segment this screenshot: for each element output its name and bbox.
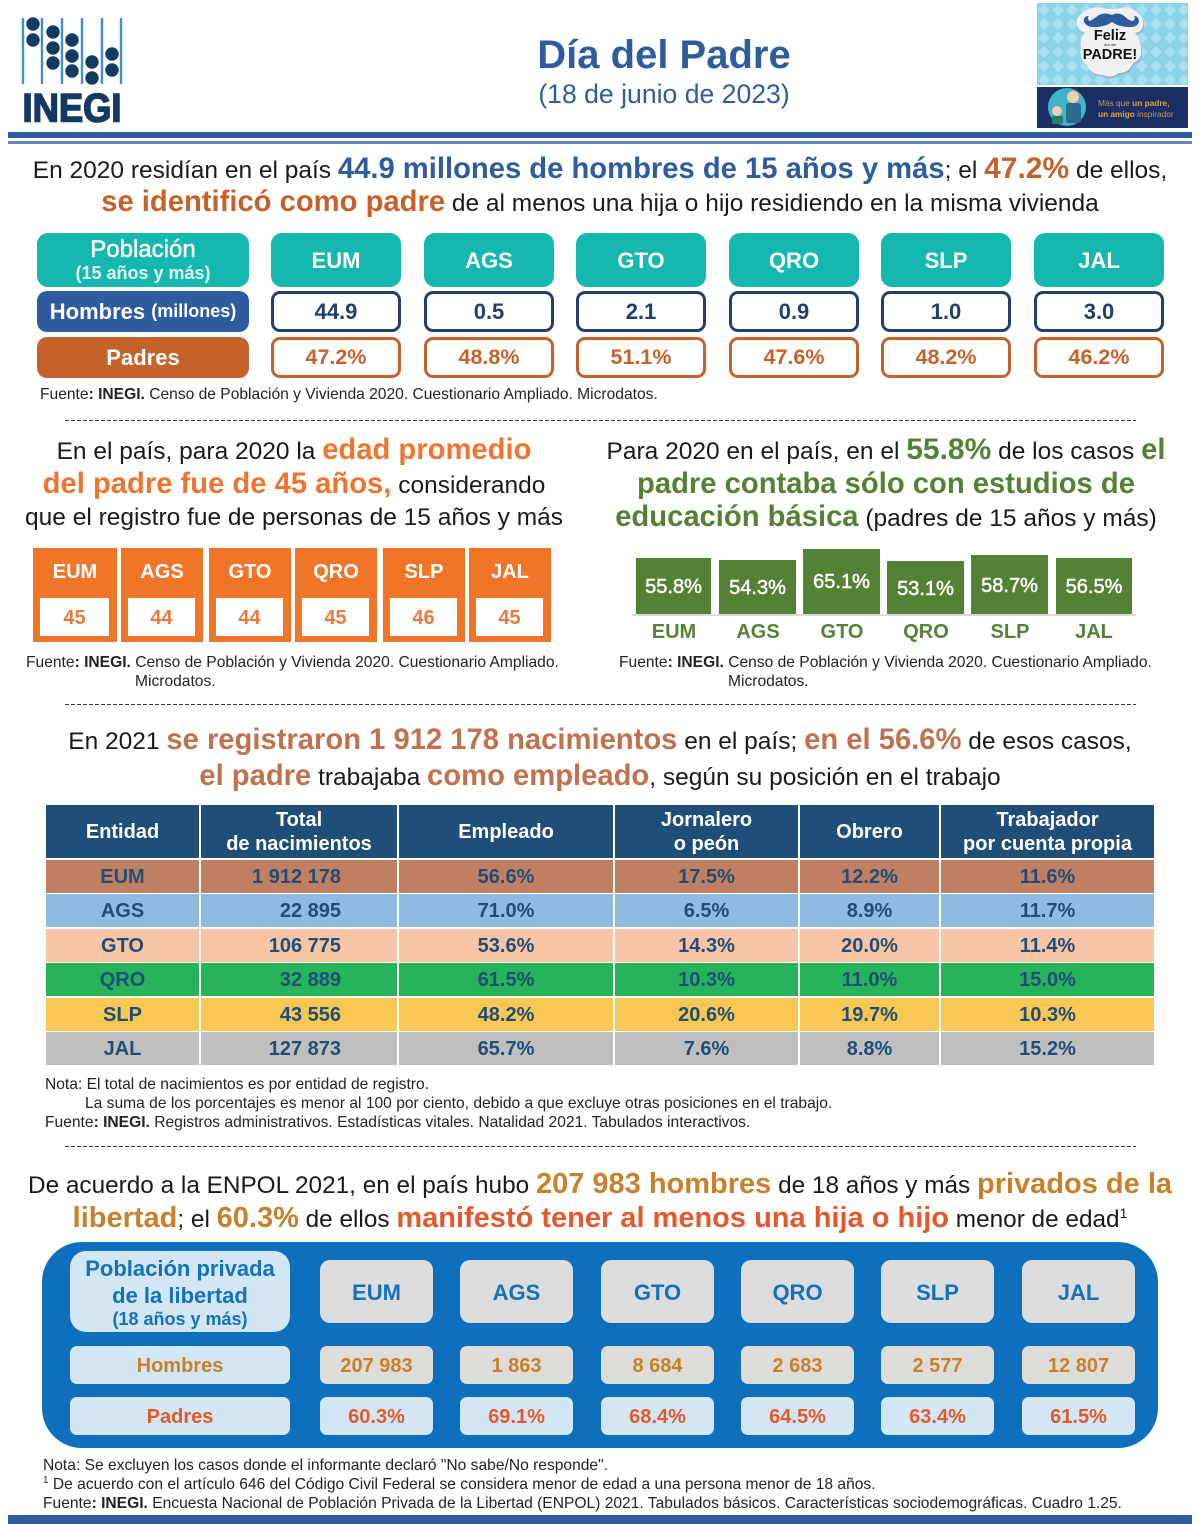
column: SLP: 1.0 xyxy=(931,298,961,324)
row: QRO: 61.5% xyxy=(478,969,534,991)
row: EUM xyxy=(46,860,1154,893)
column: AGS: 0.5 xyxy=(474,298,504,324)
column: QRO: 2 683 xyxy=(772,1354,823,1376)
column: EUM: 47.2% xyxy=(306,345,366,369)
table notes xyxy=(45,1076,832,1131)
footer rule xyxy=(8,1515,1192,1524)
column: EUM: 207 983 xyxy=(340,1354,413,1376)
logo: INEGI xyxy=(22,17,122,125)
label: padres: Padres xyxy=(147,1406,213,1428)
label: padres xyxy=(70,1397,290,1435)
row: SLP: 48.2% xyxy=(478,1004,534,1026)
table header: Trabajador xyxy=(996,808,1099,830)
bar: JAL: 56.5% xyxy=(1066,576,1122,598)
column: JAL: JAL xyxy=(1058,1280,1099,1304)
column: SLP: 2 577 xyxy=(912,1354,963,1376)
row: AGS: 22 895 xyxy=(280,900,341,922)
table header: Obrero xyxy=(836,820,903,842)
column: JAL: 3.0 xyxy=(1084,298,1114,324)
column: AGS: AGS xyxy=(493,1280,540,1304)
card: AGS: 44 xyxy=(150,606,173,628)
bar: SLP xyxy=(971,555,1048,614)
section 2 heading: edad promedio: que el registro fue de personas de 15 años y más xyxy=(25,504,563,531)
table header: Entidad xyxy=(86,820,159,842)
section 2 heading: edad promedio xyxy=(25,434,563,531)
row label: población xyxy=(37,233,249,287)
image: Feliz día del Padre: Más que un padre, xyxy=(1098,98,1169,108)
row: JAL: 15.2% xyxy=(1019,1038,1076,1060)
table notes: La suma de los porcentajes es menor al 100 por ciento, debido a que excluye otras posiciones en el trabajo. xyxy=(85,1095,832,1112)
column: SLP: 48.2% xyxy=(916,345,976,369)
bar: EUM: 55.8% xyxy=(645,576,702,598)
label: hombres xyxy=(70,1346,290,1384)
section 5 heading: privados de la libertad: libertad; el 60.3% de ellos manifestó tener al menos una hija o hijo menor de edad1 xyxy=(73,1202,1127,1234)
column: QRO: QRO xyxy=(769,248,819,273)
row: AGS: 11.7% xyxy=(1020,900,1075,922)
column: EUM: EUM xyxy=(352,1280,401,1304)
row: JAL: 8.8% xyxy=(847,1038,892,1060)
source note 3: Fuente: INEGI. Censo de Población y Vivienda 2020. Cuestionario Ampliado. xyxy=(619,654,1152,671)
row: EUM: 12.2% xyxy=(841,866,898,888)
column: QRO: 0.9 xyxy=(779,298,809,324)
row: EUM: 17.5% xyxy=(678,866,735,888)
column: QRO xyxy=(741,1260,854,1435)
section 3 heading: estudios: padre contaba sólo con estudios de xyxy=(637,468,1135,500)
column: AGS: 48.8% xyxy=(459,345,519,369)
row: AGS: AGS xyxy=(101,900,144,922)
column: QRO: 47.6% xyxy=(764,345,824,369)
card: SLP: 46 xyxy=(412,606,435,628)
column: SLP: SLP xyxy=(916,1280,959,1304)
label: JAL: JAL xyxy=(1075,620,1113,642)
row: GTO: 106 775 xyxy=(269,935,341,957)
footer notes: Fuente: INEGI. Encuesta Nacional de Población Privada de la Libertad (ENPOL) 2021. Tabulados básicos. Características sociodemográficas. Cuadro 1.25. xyxy=(43,1495,1122,1512)
column: JAL: JAL xyxy=(1078,248,1120,273)
label: población privada: (18 años y más) xyxy=(112,1308,248,1328)
column: GTO: GTO xyxy=(617,248,665,273)
row label: padres xyxy=(37,337,249,378)
source note 2 xyxy=(26,654,559,690)
table notes: Fuente: INEGI. Registros administrativos. Estadísticas vitales. Natalidad 2021. Tabulados interactivos. xyxy=(45,1114,750,1131)
card: JAL: 45 xyxy=(498,606,521,628)
column: AGS xyxy=(460,1260,573,1435)
source note 2: Fuente: INEGI. Censo de Población y Vivienda 2020. Cuestionario Ampliado. xyxy=(26,654,559,671)
row label: padres: Padres xyxy=(106,344,180,370)
label: SLP: SLP xyxy=(991,620,1029,642)
section 1 heading xyxy=(33,152,1167,218)
subtitle: (18 de junio de 2023) xyxy=(538,79,790,109)
row: JAL: 65.7% xyxy=(478,1038,534,1060)
row label: hombres: (millones) xyxy=(151,301,236,321)
column: QRO: QRO xyxy=(772,1280,823,1304)
source note 2: Microdatos. xyxy=(135,673,216,690)
section 5 heading: privados de la libertad: De acuerdo a la ENPOL 2021, en el país hubo 207 983 hombres de 18 años y más privados de la xyxy=(28,1168,1172,1200)
section 2 heading: edad promedio: del padre fue de 45 años, considerando xyxy=(43,468,545,500)
column: GTO: GTO xyxy=(634,1280,681,1304)
row: QRO: 32 889 xyxy=(280,969,341,991)
table header: Empleado xyxy=(458,820,554,842)
row: QRO: 10.3% xyxy=(678,969,735,991)
row: AGS: 6.5% xyxy=(684,900,729,922)
row: EUM: EUM xyxy=(100,866,145,888)
row: AGS xyxy=(46,894,1154,927)
section 1 heading: se identificó como padre de al menos una hija o hijo residiendo en la misma vivienda xyxy=(101,186,1099,218)
column: EUM: 60.3% xyxy=(348,1406,405,1428)
panel: hombres y padres por entidad xyxy=(37,233,1164,378)
image: Feliz día del Padre: un amigo inspirador xyxy=(1098,109,1174,119)
row: SLP xyxy=(46,998,1154,1031)
table header: Total xyxy=(276,808,322,830)
row: QRO: 15.0% xyxy=(1019,969,1076,991)
column: JAL xyxy=(1034,233,1164,378)
card: EUM xyxy=(33,548,117,642)
bar: GTO xyxy=(803,549,880,614)
row label: hombres: Hombres xyxy=(50,298,145,324)
label: población privada xyxy=(70,1251,290,1332)
row: EUM: 1 912 178 xyxy=(252,866,341,888)
section 1 heading: En 2020 residían en el país 44.9 millones de hombres de 15 años y más; el 47.2% de ellos, xyxy=(33,152,1167,185)
panel: población privada de la libertad xyxy=(42,1242,1158,1448)
bar: AGS: 54.3% xyxy=(729,576,786,598)
row: AGS: 8.9% xyxy=(847,900,892,922)
section 4 heading: nacimientos: En 2021 se registraron 1 912 178 nacimientos en el país; en el 56.6% de esos casos, xyxy=(68,724,1132,756)
row: EUM: 56.6% xyxy=(478,866,534,888)
row: GTO: GTO xyxy=(101,935,144,957)
card: SLP xyxy=(383,548,465,642)
column: JAL: 46.2% xyxy=(1069,345,1129,369)
image: Feliz día del Padre xyxy=(1037,3,1188,128)
label: EUM: EUM xyxy=(652,620,696,642)
card: QRO xyxy=(295,548,377,642)
card: EUM: EUM xyxy=(53,560,97,582)
card: JAL: JAL xyxy=(491,560,529,582)
bar: GTO: 65.1% xyxy=(813,571,870,593)
row: SLP: 20.6% xyxy=(678,1004,735,1026)
column: GTO: 51.1% xyxy=(611,345,671,369)
section 3 heading: estudios xyxy=(607,433,1165,533)
row: QRO: 11.0% xyxy=(842,969,897,991)
label: población privada: de la libertad xyxy=(112,1282,248,1308)
row: JAL: 127 873 xyxy=(269,1038,341,1060)
column: SLP: 63.4% xyxy=(909,1406,966,1428)
bar: QRO: 53.1% xyxy=(897,578,954,600)
table header xyxy=(46,805,1154,858)
row: GTO xyxy=(46,929,1154,962)
column: SLP xyxy=(881,1260,994,1435)
column: GTO: 68.4% xyxy=(629,1406,686,1428)
table header: de nacimientos xyxy=(226,832,372,854)
column: GTO: 2.1 xyxy=(626,298,656,324)
column: EUM xyxy=(271,233,401,378)
source note 3 xyxy=(619,654,1152,690)
header rule xyxy=(8,132,1192,144)
label: QRO: QRO xyxy=(903,620,949,642)
row: JAL: JAL xyxy=(104,1038,141,1060)
card: GTO: GTO xyxy=(229,560,271,582)
card: QRO: 45 xyxy=(324,606,347,628)
column: GTO: 8 684 xyxy=(632,1354,683,1376)
section 5 heading: privados de la libertad xyxy=(28,1168,1172,1234)
footer notes: Nota: Se excluyen los casos donde el informante declaró "No sabe/No responde". xyxy=(43,1457,608,1474)
row: GTO: 53.6% xyxy=(478,935,534,957)
bar: QRO xyxy=(887,561,964,614)
label: AGS: AGS xyxy=(736,620,780,642)
row label: población: Población xyxy=(90,236,196,263)
label: hombres: Hombres xyxy=(137,1354,223,1376)
bar: SLP: 58.7% xyxy=(981,574,1038,596)
row: AGS: 71.0% xyxy=(478,900,534,922)
row: SLP: 19.7% xyxy=(841,1004,898,1026)
table header: Jornalero xyxy=(661,808,752,830)
column: SLP: SLP xyxy=(925,248,967,273)
column: AGS: 69.1% xyxy=(488,1406,545,1428)
image: Feliz día del Padre: Feliz xyxy=(1094,28,1126,44)
column: GTO xyxy=(576,233,706,378)
section 3 heading: estudios: educación básica (padres de 15 años y más) xyxy=(615,501,1157,533)
row: JAL xyxy=(46,1032,1154,1065)
title: Día del Padre xyxy=(537,33,791,77)
row: SLP: 10.3% xyxy=(1019,1004,1076,1026)
column: JAL: 12 807 xyxy=(1048,1354,1109,1376)
card: GTO xyxy=(209,548,291,642)
column: JAL xyxy=(1022,1260,1135,1435)
section 2 heading: edad promedio: En el país, para 2020 la edad promedio xyxy=(57,434,531,466)
table notes: Nota: El total de nacimientos es por entidad de registro. xyxy=(45,1076,429,1093)
section 4 heading: nacimientos: el padre trabajaba como empleado, según su posición en el trabajo xyxy=(199,760,1001,792)
column: EUM: 44.9 xyxy=(315,298,357,324)
column: QRO: 64.5% xyxy=(769,1406,826,1428)
card: AGS xyxy=(121,548,203,642)
card: EUM: 45 xyxy=(63,606,86,628)
row: JAL: 7.6% xyxy=(684,1038,729,1060)
column: GTO xyxy=(601,1260,714,1435)
row: GTO: 20.0% xyxy=(841,935,898,957)
column: SLP xyxy=(881,233,1011,378)
row: GTO: 11.4% xyxy=(1020,935,1075,957)
row: QRO xyxy=(46,963,1154,996)
footer notes: 1 De acuerdo con el artículo 646 del Código Civil Federal se considera menor de edad a una persona menor de 18 años. xyxy=(43,1475,876,1493)
image: Feliz día del Padre: día del xyxy=(1104,42,1116,47)
bar: AGS xyxy=(719,560,796,614)
bar: JAL xyxy=(1056,558,1132,614)
column: AGS: 1 863 xyxy=(491,1354,542,1376)
card: GTO: 44 xyxy=(238,606,261,628)
column: AGS: AGS xyxy=(465,248,513,273)
row: EUM: 11.6% xyxy=(1020,866,1075,888)
row: SLP: SLP xyxy=(103,1004,142,1026)
row: SLP: 43 556 xyxy=(280,1004,341,1026)
panel: edad promedio por entidad xyxy=(33,548,551,642)
label: población privada: Población privada xyxy=(85,1256,275,1280)
source note 3: Microdatos. xyxy=(728,673,809,690)
card: AGS: AGS xyxy=(140,560,184,582)
card: JAL xyxy=(469,548,551,642)
column: JAL: 61.5% xyxy=(1050,1406,1107,1428)
footer notes xyxy=(43,1457,1122,1512)
card: SLP: SLP xyxy=(405,560,443,582)
section 3 heading: estudios: Para 2020 en el país, en el 55.8% de los casos el xyxy=(607,433,1165,466)
section 4 heading: nacimientos xyxy=(68,724,1132,792)
card: QRO: QRO xyxy=(313,560,359,582)
column: EUM xyxy=(320,1260,433,1435)
column: QRO xyxy=(729,233,859,378)
bar: EUM xyxy=(636,558,711,614)
image: Feliz día del Padre: PADRE! xyxy=(1083,47,1137,63)
label: GTO: GTO xyxy=(821,620,863,642)
table: nacimientos por posición en el trabajo xyxy=(46,805,1154,1065)
table header: o peón xyxy=(674,832,739,854)
bar chart: educación básica xyxy=(632,549,1136,642)
row: GTO: 14.3% xyxy=(678,935,735,957)
column: AGS xyxy=(424,233,554,378)
row: QRO: QRO xyxy=(100,969,145,991)
row label: población: (15 años y más) xyxy=(75,263,211,283)
source note 1: Fuente: INEGI. Censo de Población y Vivienda 2020. Cuestionario Ampliado. Microdatos. xyxy=(40,386,658,403)
row label: hombres xyxy=(37,291,249,332)
table header: por cuenta propia xyxy=(963,832,1132,854)
column: EUM: EUM xyxy=(312,248,360,273)
